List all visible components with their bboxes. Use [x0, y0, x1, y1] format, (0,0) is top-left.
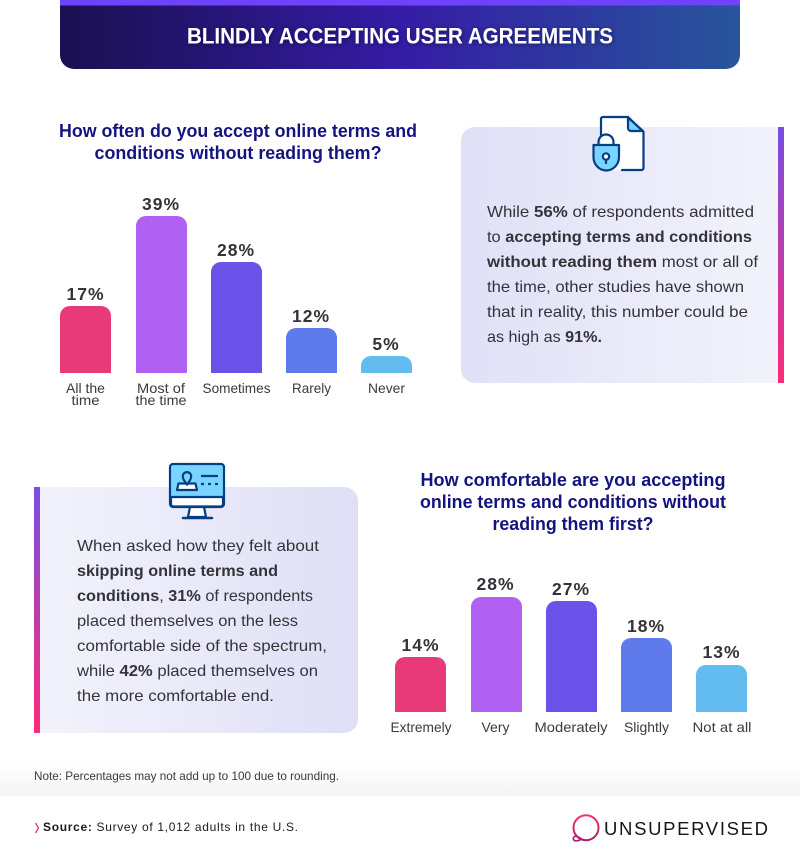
bar: very	[471, 574, 522, 735]
bar: sometimes: Sometimes	[202, 380, 270, 396]
logo: Unsupervised	[573, 815, 768, 841]
callout text: as high as 91%.	[487, 329, 602, 346]
heading: how often	[59, 121, 417, 163]
bar: rarely	[286, 306, 337, 396]
bar: not at all	[692, 642, 752, 735]
header banner	[60, 0, 740, 69]
bar: moderately: Moderately	[534, 719, 608, 735]
callout text: the time, other studies have shown	[487, 279, 744, 296]
bar: very: Very	[482, 719, 510, 735]
bar: most of the time: Most of	[137, 380, 185, 396]
bar: all the time: 17%	[66, 284, 105, 304]
heading: how comfortable: How comfortable are you accepting	[420, 470, 726, 490]
bar: never	[361, 334, 412, 396]
bar: all the time: All the	[66, 380, 105, 396]
bar: not at all: Not at all	[692, 719, 752, 735]
note band	[0, 762, 800, 796]
bar: very: 28%	[476, 574, 515, 594]
icon: computer monitor	[170, 464, 224, 518]
panel: comfort callout	[34, 487, 358, 733]
bar: moderately	[534, 579, 608, 735]
panel: 56% callout	[461, 127, 784, 383]
bar: extremely: 14%	[401, 635, 440, 655]
bar chart: how comfortable	[390, 574, 752, 735]
bar: all the time: time	[72, 392, 100, 408]
heading: how comfortable: online terms and conditions without	[420, 492, 726, 512]
bar: moderately: 27%	[552, 579, 590, 599]
bar: rarely: Rarely	[292, 380, 331, 396]
heading: how often: conditions without reading them?	[94, 143, 382, 163]
callout text	[486, 204, 759, 346]
heading: how often: How often do you accept online terms and	[59, 121, 417, 141]
callout text: placed themselves on the less	[77, 613, 298, 630]
bar: most of the time: the time	[136, 392, 187, 408]
bar: not at all: 13%	[702, 642, 741, 662]
heading: how comfortable	[420, 470, 726, 534]
callout text: to accepting terms and conditions	[487, 229, 752, 246]
source line: Source: Survey of 1,012 adults in the U.S.	[43, 820, 298, 834]
bar: most of the time	[136, 194, 187, 408]
bar chart: how often	[60, 194, 412, 408]
bar: sometimes	[202, 240, 270, 396]
bar: rarely: 12%	[292, 306, 330, 326]
title: BLINDLY ACCEPTING USER AGREEMENTS	[187, 24, 613, 48]
note text: Note: Percentages may not add up to 100 due to rounding.	[34, 769, 339, 783]
heading: how comfortable: reading them first?	[492, 514, 654, 534]
bar: most of the time: 39%	[142, 194, 180, 214]
callout text: the more comfortable end.	[77, 688, 274, 705]
callout text: skipping online terms and	[77, 563, 278, 580]
bar: never: 5%	[372, 334, 400, 354]
logo: Unsupervised: UNSUPERVISED	[604, 818, 768, 839]
bar: never: Never	[368, 380, 405, 396]
callout text: while 42% placed themselves on	[76, 663, 318, 680]
callout text	[76, 538, 327, 705]
bar: slightly	[621, 616, 672, 735]
callout text: without reading them most or all of	[486, 254, 759, 271]
bar: extremely	[390, 635, 452, 735]
icon: chevron	[36, 823, 38, 833]
icon: locked document	[594, 117, 644, 171]
callout text: While 56% of respondents admitted	[487, 204, 754, 221]
callout text: comfortable side of the spectrum,	[77, 638, 327, 655]
callout text: that in reality, this number could be	[487, 304, 748, 321]
bar: slightly: Slightly	[624, 719, 669, 735]
bar: extremely: Extremely	[390, 719, 452, 735]
bar: all the time	[60, 284, 111, 408]
bar: slightly: 18%	[627, 616, 665, 636]
callout text: When asked how they felt about	[77, 538, 320, 555]
callout text: conditions, 31% of respondents	[77, 588, 313, 605]
bar: sometimes: 28%	[217, 240, 255, 260]
